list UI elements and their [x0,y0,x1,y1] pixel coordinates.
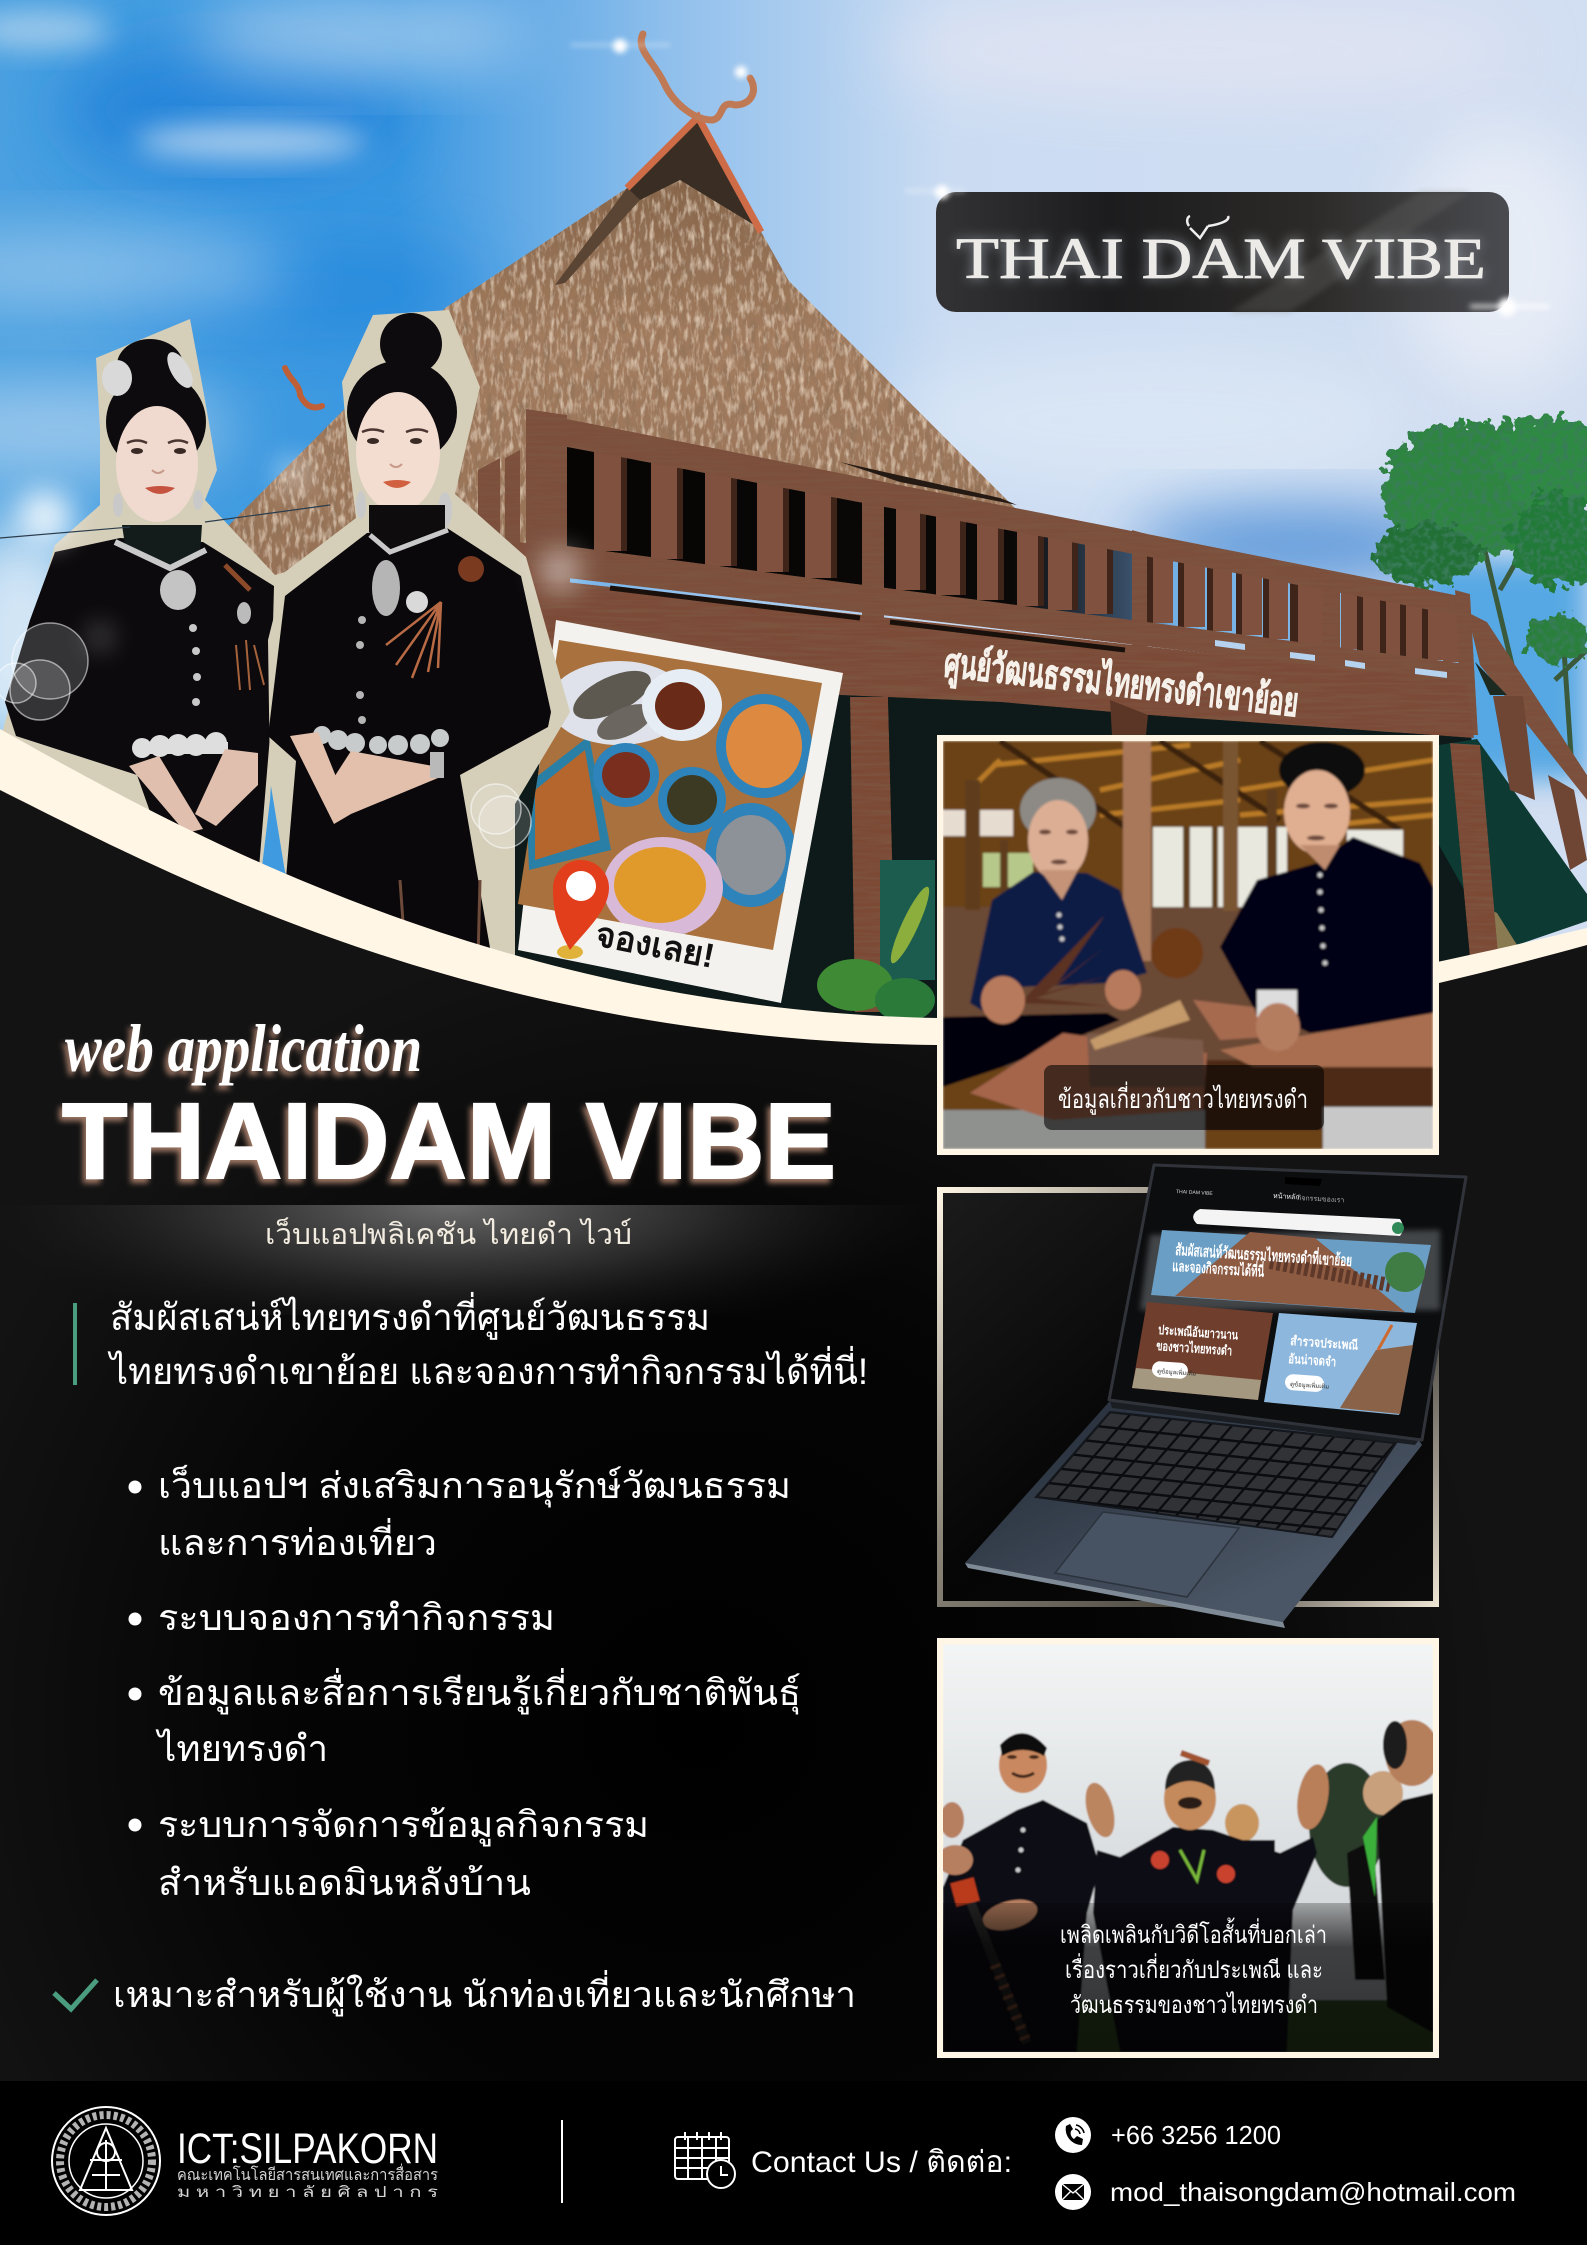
tray [526,736,611,870]
bullet 1: เว็บแอปฯ ส่งเสริมการอนุรักษ์วัฒนธรรม [158,1463,791,1508]
windows [1153,827,1287,907]
video dark overlay [943,1903,1433,2052]
audience text: เหมาะสำหรับผู้ใช้งาน นักท่องเที่ยวและนักศึกษา [113,1970,856,2017]
paper cutout [268,310,570,990]
right card [1264,1313,1417,1415]
caption: เรื่องราวเกี่ยวกับประเพณี และ [1065,1953,1323,1984]
tree [1309,1763,1385,1887]
search bar [1193,1209,1403,1236]
intro text [107,1291,868,1392]
back floor [943,906,1337,1068]
caption [1060,1917,1327,2019]
bullet 3: ข้อมูลและสื่อการเรียนรู้เกี่ยวกับชาติพันธุ์ [158,1668,801,1715]
belt [132,732,228,758]
face [116,406,198,522]
omelette plate [603,837,723,937]
under deck [500,690,1495,1060]
hands [129,749,258,833]
under roof shade [840,462,1017,505]
dress hem detail [400,880,480,960]
fish plate [560,661,666,745]
bullet 4: ระบบการจัดการข้อมูลกิจกรรม [158,1804,649,1847]
map pin [553,860,609,959]
site nav: หน้าหลัก [1273,1192,1300,1201]
face [356,392,440,512]
caption: วัฒนธรรมของชาวไทยทรงดำ [1070,1991,1318,2019]
right card: อันน่าจดจำ [1288,1351,1337,1369]
hairpieces [102,348,198,396]
background sky [0,0,1587,1100]
divider [561,2120,563,2203]
food polaroid [500,620,843,1003]
email contact [1055,2174,1516,2210]
panel: elders photo [937,735,1439,1155]
laptop base [965,1402,1422,1622]
trackpad [1055,1512,1239,1597]
intro text: ไทยทรงดำเขาย้อย และจองการทำกิจกรรมได้ที่นี่! [107,1345,868,1392]
roof side shade [555,188,640,285]
keyboard [1036,1412,1396,1537]
right card: ดูข้อมูลเพิ่มเติม [1290,1380,1329,1391]
accent bar [73,1303,77,1385]
dress [268,528,551,965]
laptop: THAI DAM VIBE [1176,1189,1213,1197]
bubbles [0,623,531,848]
deck fascia [530,578,1474,738]
ICT Silpakorn wordmark: คณะเทคโนโลยีสารสนเทศและการสื่อสาร [177,2163,438,2184]
plants [817,860,935,1022]
roof finial [641,34,754,120]
food photo [518,640,822,950]
lens flares [570,39,1550,316]
photo scene [943,741,1433,1149]
dress [5,538,274,880]
brooch and embroidery [225,565,264,690]
main title: THAIDAM VIBE [62,1080,836,1201]
bullet 2: ระบบจองการทำกิจกรรม [158,1597,555,1638]
earrings [356,491,452,528]
logo wordmark: THAI DAM VIBE [956,226,1486,291]
laptop [965,1165,1466,1628]
footer bar [0,2081,1587,2245]
wire [0,505,330,538]
bullet 1 [128,1463,791,1563]
antlers [1187,216,1228,238]
right woman [268,310,570,990]
cream wave [0,729,1587,1060]
jar [1151,928,1203,978]
calendar icon [675,2132,735,2188]
email contact: mod_thaisongdam@hotmail.com [1110,2177,1516,2207]
posts [850,697,896,1012]
intro text: สัมผัสเสน่ห์ไทยทรงดำที่ศูนย์วัฒนธรรม [110,1291,710,1340]
banner [1151,1230,1431,1313]
tree [1370,417,1587,770]
right elder [1220,742,1433,1033]
left woman [0,319,285,900]
subtitle: เว็บแอปพลิเคชัน ไทยดำ ไวบ์ [265,1216,632,1251]
slits above fascia [1215,640,1447,678]
left card [1132,1302,1273,1400]
screen sheen [1140,1230,1440,1310]
sign text: ศูนย์วัฒนธรรมไทยทรงดำเขาย้อย [942,639,1301,727]
collar and necklace [369,505,445,548]
posts [965,741,1277,911]
paper cutout [0,319,285,900]
laughing woman [1080,1750,1334,2052]
logo badge [936,192,1509,312]
ground [1077,2000,1433,2052]
left card: ดูข้อมูลเพิ่มเติม [1157,1367,1196,1378]
right card: สำรวจประเพณี [1290,1333,1359,1353]
buttons [356,616,366,724]
banner: และจองกิจกรรมได้ที่นี่ [1172,1255,1265,1281]
ICT Silpakorn wordmark [177,2125,438,2201]
ICT Silpakorn wordmark: ม ห า วิ ท ย า ลั ย ศิ ล ป า ก ร [177,2184,438,2201]
right group [1347,1720,1439,2033]
background person [1225,1804,1275,1890]
hands [290,732,438,824]
phone contact [1055,2117,1281,2153]
lower left wall fill [500,540,570,720]
thatched roof building [218,34,1587,1060]
baluster shaded sides [621,450,1428,660]
earrings [113,490,203,517]
bowls [642,669,722,741]
collar and necklace [122,525,202,565]
laptop: กิจกรรมของเรา [1297,1194,1345,1204]
subtitle glow band [0,1205,920,1315]
caption box [1044,1065,1324,1130]
phone contact: +66 3256 1200 [1111,2120,1281,2150]
contact label: Contact Us / ติดต่อ: [751,2146,1012,2179]
hair [106,339,206,472]
dark background [0,790,1587,2245]
brooch and fan embroidery [386,556,484,678]
hinge [1109,1398,1422,1445]
bun and hair [347,313,457,464]
notch [1285,1177,1322,1186]
caption: ข้อมูลเกี่ยวกับชาวไทยทรงดำ [1058,1081,1308,1115]
bullet 3: ไทยทรงดำ [155,1728,328,1769]
university seal [52,2107,160,2215]
script heading: web application [65,1010,422,1086]
feature bullet list [128,1463,801,1903]
left elder [943,778,1147,1087]
watch [430,752,444,778]
bullet 4 [128,1804,649,1903]
left card: ประเพณีอันยาวนาน [1158,1322,1239,1343]
left card: ของชาวไทยทรงดำ [1156,1337,1233,1358]
staircase [1439,612,1587,958]
screen bezel [1109,1165,1466,1440]
caption: เพลิดเพลินกับวิดีโอสั้นที่บอกเล่า [1060,1917,1327,1949]
shadow slit under rail [610,588,1125,650]
soft glows [19,459,580,645]
bullet 1: และการท่องเที่ยว [158,1518,437,1563]
bullet 4: สำหรับแอดมินหลังบ้าน [158,1862,531,1903]
ICT Silpakorn wordmark: ICT:SILPAKORN [177,2125,438,2173]
buttons [189,624,201,706]
rails and posts [478,409,1478,735]
small finial [285,368,322,407]
bullet 3 [128,1668,801,1769]
book now text: จองเลย! [592,916,718,976]
gable [627,117,761,232]
roof [218,117,1017,620]
floor mat [1203,1060,1433,1130]
banner heading: สัมผัสเสน่ห์วัฒนธรรมไทยทรงดำที่เขาย้อย [1175,1238,1353,1270]
legs, basket [970,1033,1207,1120]
panel: laptop frame [940,1165,1466,1628]
panel: festival photo [937,1638,1439,2058]
belt [313,726,449,755]
man with instrument [937,1733,1100,2052]
check icon [54,1980,97,2009]
railing gaps [567,430,1460,672]
ground behind stairs [1439,840,1520,975]
railing balusters [594,450,1460,662]
